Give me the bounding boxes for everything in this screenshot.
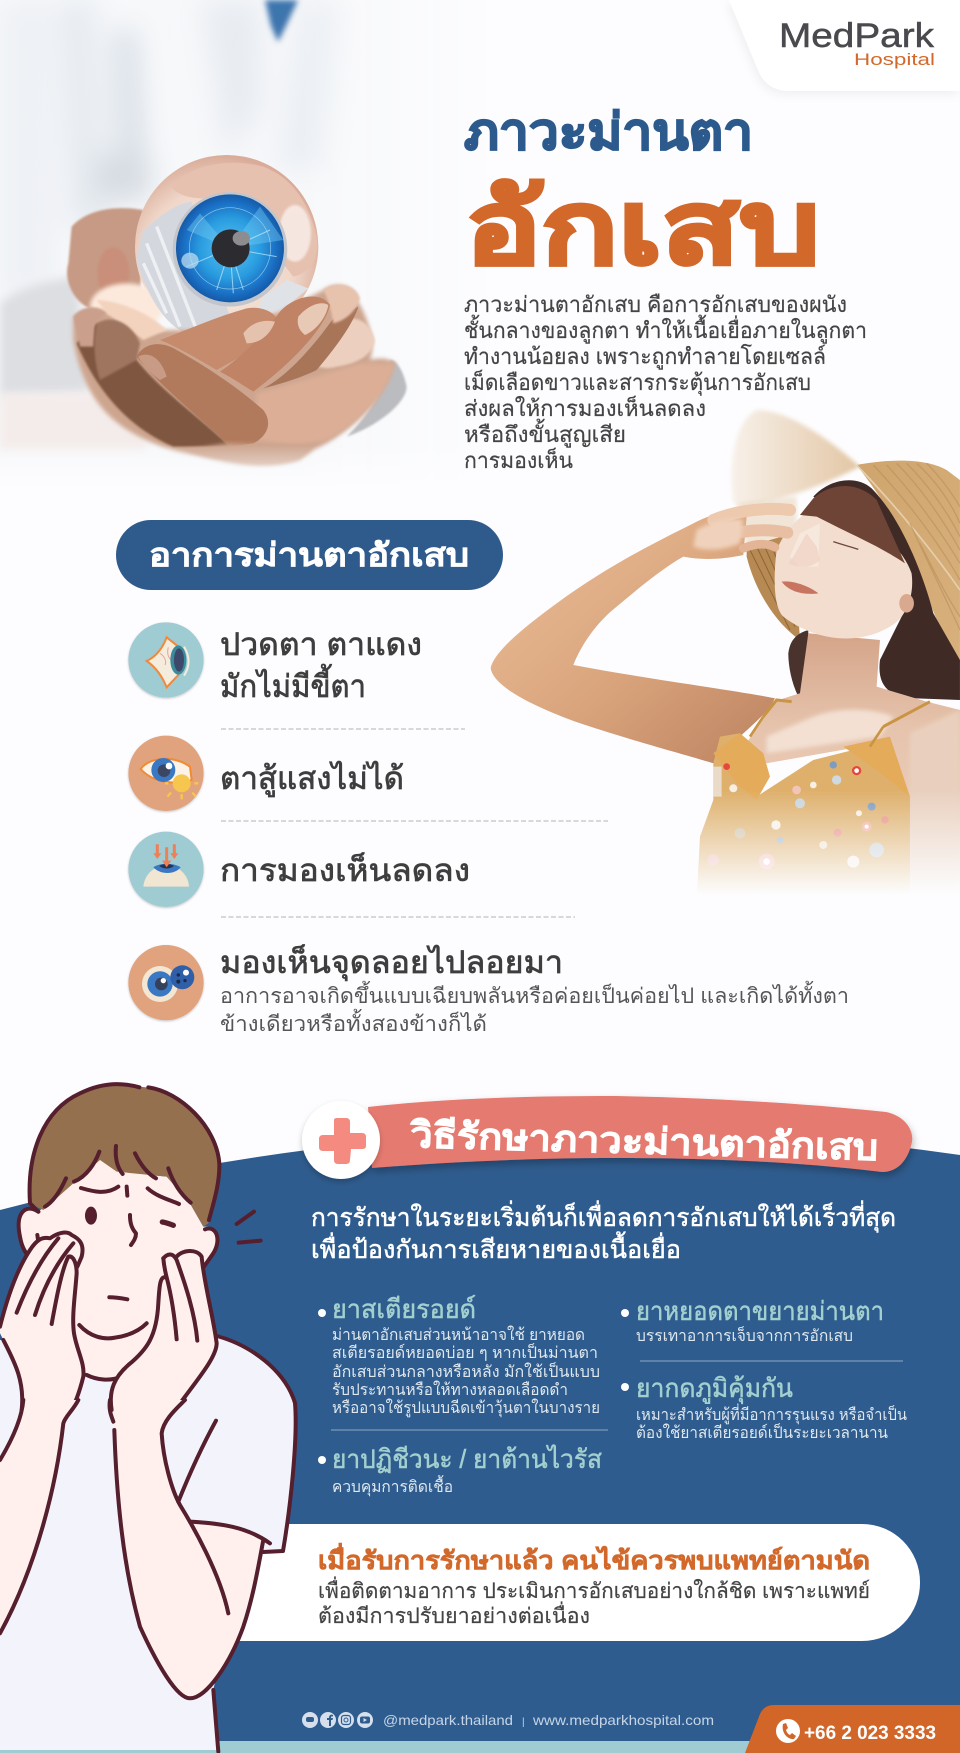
treatment intro — [311, 1200, 896, 1264]
intro text block: หรือถึงขั้นสูญเสีย — [464, 419, 626, 448]
intro text block — [464, 292, 867, 473]
treatment: steroids: ม่านตาอักเสบส่วนหน้าอาจใช้ ยาหยอด — [332, 1325, 585, 1344]
logo text: MedPark: MedPark — [779, 17, 935, 55]
treatment: steroids: อักเสบส่วนกลางหรือหลัง มักใช้เป็นแบบ — [332, 1361, 600, 1381]
treatment divider left — [331, 1429, 608, 1431]
shirt shoulder outline — [217, 1336, 296, 1552]
treatment: steroids: รับประทานหรือให้ทางหลอดเลือดดำ — [332, 1380, 568, 1399]
treatment divider right — [640, 1360, 903, 1362]
dress — [697, 733, 910, 900]
neck and chest — [747, 633, 960, 900]
icon: light sensitivity — [128, 736, 204, 811]
follow-up callout — [230, 1524, 920, 1641]
intro text block: ภาวะม่านตาอักเสบ คือการอักเสบของผนัง — [464, 292, 847, 317]
symptom text: floaters — [220, 944, 849, 1036]
hair — [813, 480, 960, 700]
arm — [491, 513, 775, 763]
blue treatment panel — [0, 1130, 960, 1753]
icon: reduced vision — [128, 832, 204, 907]
treatment intro: เพื่อป้องกันการเสียหายของเนื้อเยื่อ — [311, 1231, 681, 1264]
symptom dividers — [221, 729, 608, 917]
intro text block: ทำงานน้อยลง เพราะถูกทำลายโดยเซลล์ — [464, 344, 826, 370]
photo: doctor holding eyeball in crystal ball — [0, 0, 408, 468]
logo text: Hospital: Hospital — [854, 50, 935, 69]
intro text block: เม็ดเลือดขาวและสารกระตุ้นการอักเสบ — [464, 368, 811, 396]
logo tab — [729, 0, 960, 91]
treatment: steroids: หรืออาจใช้รูปแบบฉีดเข้าวุ้นตาในบางราย — [332, 1398, 600, 1418]
title: ภาวะม่านตา — [464, 104, 753, 160]
treatment: steroids: ยาสเตียรอยด์ — [332, 1294, 476, 1324]
doctor coat background — [0, 0, 344, 295]
shirt — [0, 1335, 296, 1753]
treatment: dilating drops — [621, 1296, 884, 1345]
title — [464, 104, 820, 285]
symptom text: light: ตาสู้แสงไม่ได้ — [220, 761, 404, 797]
follow-up callout: ต้องมีการปรับยาอย่างต่อเนื่อง — [318, 1601, 590, 1628]
upper body, head and hands — [0, 1084, 261, 1410]
footer social icons — [302, 1712, 373, 1728]
treatment: immunosuppressants: ยากดภูมิคุ้มกัน — [636, 1373, 793, 1404]
icon: floaters — [128, 945, 204, 1020]
intro text block: ชั้นกลางของลูกตา ทำให้เนื้อเยื่อภายในลูกตา — [464, 315, 867, 344]
symptom text: floaters: มองเห็นจุดลอยไปลอยมา — [220, 944, 563, 982]
illustration: worried man touching face — [0, 1084, 296, 1753]
treatment intro: การรักษาในระยะเริ่มต้นก็เพื่อลดการอักเสบให้ได้เร็วที่สุด — [311, 1200, 896, 1233]
photo: woman shading eyes with straw hat — [491, 410, 960, 935]
intro text block: ส่งผลให้การมองเห็นลดลง — [464, 394, 706, 421]
treatment: immunosuppressants: ต้องใช้ยาสเตียรอยด์เป็นระยะเวลานาน — [636, 1422, 888, 1442]
treatment: dilating drops: บรรเทาอาการเจ็บจากการอักเสบ — [636, 1325, 853, 1345]
bottom fade of woman photo — [680, 790, 960, 895]
follow-up callout: เพื่อติดตามอาการ ประเมินการอักเสบอย่างใกล้ชิด เพราะแพทย์ — [318, 1576, 870, 1603]
symptom text: floaters: อาการอาจเกิดขึ้นแบบเฉียบพลันหรือค่อยเป็นค่อยไป และเกิดได้ทั้งตา — [220, 981, 849, 1008]
follow-up callout: เมื่อรับการรักษาแล้ว คนไข้ควรพบแพทย์ตามนัด — [318, 1543, 870, 1575]
treatment: antibiotics: ยาปฏิชีวนะ / ยาต้านไวรัส — [332, 1444, 602, 1474]
footer handle and website: www.medparkhospital.com — [532, 1712, 714, 1728]
banner title: วิธีรักษาภาวะม่านตาอักเสบ — [409, 1114, 879, 1168]
tie — [265, 0, 298, 42]
symptom text: vision: การมองเห็นลดลง — [220, 852, 470, 888]
phone tab: +66 2 023 3333 — [804, 1723, 936, 1744]
symptom text: floaters: ข้างเดียวหรือทั้งสองข้างก็ได้ — [220, 1009, 487, 1036]
treatment: antibiotics: ควบคุมการติดเชื้อ — [332, 1475, 453, 1497]
treatment: steroids: สเตียรอยด์หยอดบ่อย ๆ หากเป็นม่านตา — [332, 1342, 598, 1362]
footer handle and website: | — [522, 1717, 525, 1728]
icon: eye pain — [128, 622, 204, 698]
treatment: immunosuppressants: เหมาะสำหรับผู้ที่มีอาการรุนแรง หรือจำเป็น — [636, 1403, 907, 1425]
treatment: steroids — [318, 1294, 600, 1418]
symptoms heading pill: อาการม่านตาอักเสบ — [149, 537, 469, 573]
treatment: immunosuppressants — [621, 1373, 907, 1442]
treatment: dilating drops: ยาหยอดตาขยายม่านตา — [636, 1296, 884, 1326]
face — [775, 507, 912, 638]
symptom text: pain: มักไม่มีขี้ตา — [220, 664, 366, 704]
cupped hands — [73, 285, 407, 466]
intro text block: การมองเห็น — [464, 446, 573, 473]
symptoms heading pill — [116, 520, 503, 590]
footer handle and website: @medpark.thailand — [383, 1712, 513, 1728]
banner plus icon — [302, 1101, 380, 1179]
symptom text: pain — [220, 627, 422, 704]
footer teal strip — [0, 1741, 960, 1753]
bottom fade of photo — [0, 445, 520, 490]
symptom text: pain: ปวดตา ตาแดง — [220, 627, 422, 662]
treatment: antibiotics — [318, 1444, 602, 1497]
footer handle and website — [383, 1712, 714, 1728]
left sleeve and background of hands — [0, 155, 318, 450]
dress flowers — [708, 761, 889, 870]
title: อักเสบ — [465, 171, 820, 285]
treatment banner — [302, 1096, 912, 1179]
lower arms and torso — [0, 1400, 270, 1752]
phone tab — [745, 1705, 960, 1753]
hat — [731, 410, 960, 663]
